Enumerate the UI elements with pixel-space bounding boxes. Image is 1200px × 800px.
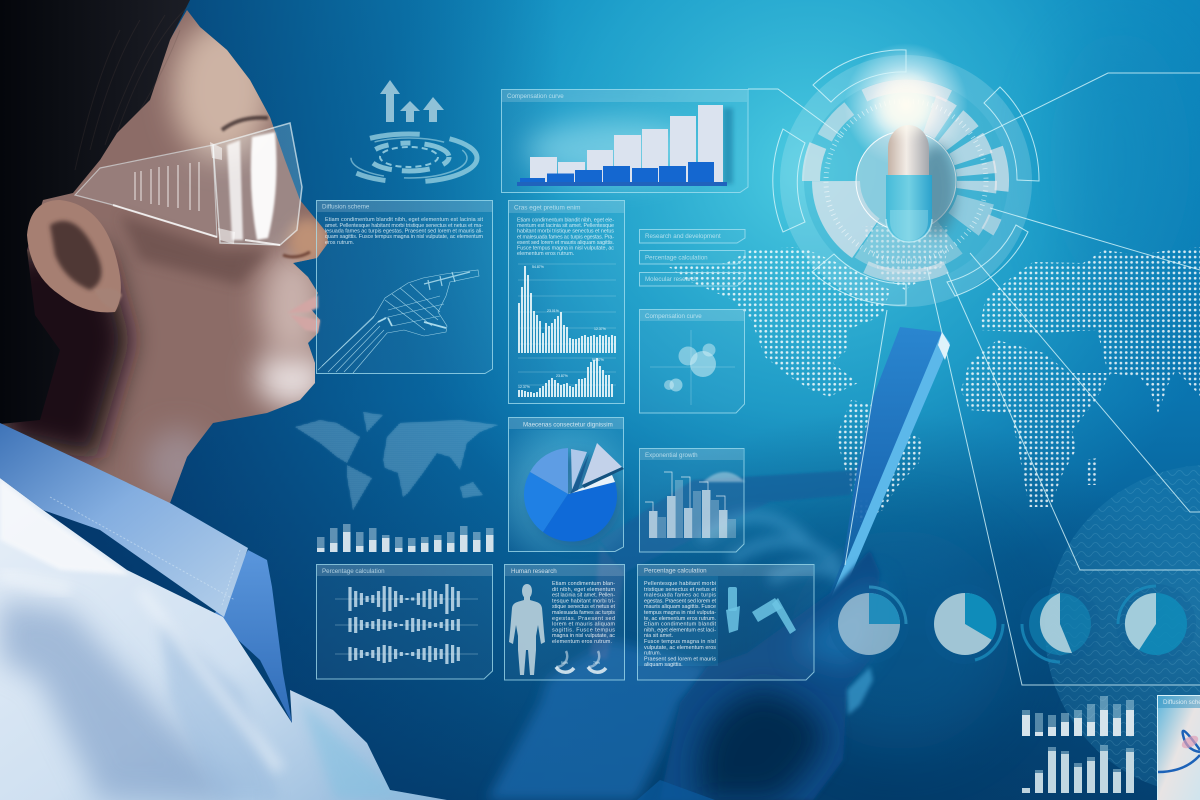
panel: cras eget pretium enim: 23.87% bbox=[556, 374, 568, 378]
panel: percentage calculation device: Praesent sed lorem et mauris bbox=[644, 656, 716, 662]
panel: human research: 75% bbox=[593, 661, 600, 665]
blue bars bbox=[520, 162, 714, 182]
panel: cras eget pretium enim: Etiam condimentum blandit nibh, eget ele- bbox=[517, 218, 614, 224]
nostril bbox=[283, 252, 310, 257]
small world map bbox=[295, 412, 498, 510]
panel: percentage calculation device: rutrum. bbox=[644, 651, 661, 657]
panel: diffusion scheme: quam sagittis. Fusce tempus magna in nisl vulputate, ac elementum bbox=[325, 234, 484, 240]
icon: upward arrows bbox=[380, 80, 444, 122]
panel: exponential growth bbox=[640, 448, 744, 552]
panel: diffusion scheme bbox=[316, 200, 492, 374]
panel: cras eget pretium enim: Fusce tempus magna in nisl vulputate, ac bbox=[517, 246, 614, 252]
panel: human research: 50% bbox=[561, 661, 568, 665]
ear bbox=[27, 200, 122, 312]
panel: human research: stique senectus et netus et bbox=[552, 604, 616, 610]
panel: percentage calculation device: Pellentesque habitant morbi bbox=[644, 581, 716, 587]
panel: percentage calculation device: Fusce tempus magna in nisl bbox=[644, 639, 716, 645]
lab coat bbox=[0, 478, 447, 800]
panel: maecenas pie chart bbox=[508, 418, 624, 552]
panel: human research: tesque habitant morbi tri- bbox=[552, 598, 615, 604]
research label tabs bbox=[640, 230, 745, 286]
segmented dial bbox=[779, 54, 1033, 308]
coat folds bbox=[0, 484, 399, 800]
panel: diffusion scheme: eros rutrum. bbox=[325, 240, 354, 246]
panel: cras eget pretium enim bbox=[508, 200, 624, 404]
panel: human research: dit nibh, eget elementum bbox=[552, 587, 616, 593]
panel: cras eget pretium enim: mentum est lacinia sit amet. Pellentesque bbox=[517, 223, 614, 229]
donut gauges bbox=[556, 651, 606, 672]
panel: percentage calculation device bbox=[638, 564, 814, 680]
panel: human research: Etiam condimentum blan- bbox=[552, 581, 615, 587]
shelf bbox=[517, 182, 727, 186]
shirt collar bbox=[0, 423, 248, 617]
icon: human silhouette bbox=[509, 584, 545, 675]
panel: exponential growth: Exponential growth bbox=[645, 452, 698, 459]
panel: compensation curve bars bbox=[502, 90, 748, 192]
bar chart under small map bbox=[317, 524, 494, 552]
panel: cras eget pretium enim: 56.87% bbox=[592, 358, 604, 362]
white bars bbox=[530, 105, 723, 182]
panel: compensation curve bars: Compensation curve bbox=[507, 93, 564, 100]
panel: percentage calculation device: egestas. Praesent sed lorem et bbox=[644, 598, 716, 604]
panel: percentage calculation device: Etiam condimentum blandit bbox=[644, 622, 716, 628]
panel: percentage calculation device: aliquam sagittis. bbox=[644, 662, 683, 668]
hair strands bbox=[75, 5, 190, 170]
hair bbox=[0, 0, 190, 424]
panel: cras eget pretium enim: esent sed lorem et mauris aliquam sagittis. bbox=[517, 240, 614, 246]
panel: human research bbox=[504, 564, 624, 680]
panel: cras eget pretium enim: Cras eget pretium enim bbox=[514, 204, 580, 212]
panel: diffusion scheme: Etiam condimentum blandit nibh, eget elementum est lacinia sit bbox=[325, 217, 484, 223]
panel: percentage calculation device: malesuada fames ac turpis bbox=[644, 593, 716, 599]
waveform rows bbox=[350, 584, 458, 664]
panel: cras eget pretium enim: elementum eros rutrum. bbox=[517, 251, 574, 257]
panel: percentage calculation waveform: Percentage calculation bbox=[322, 568, 385, 575]
panel: compensation curve bubbles: Compensation curve bbox=[645, 313, 702, 320]
blue shirt bbox=[213, 550, 292, 723]
panel: percentage calculation device: mauris aliquam sagittis. Fusce bbox=[644, 604, 716, 610]
hand holding tablet bbox=[487, 327, 950, 800]
panel: percentage calculation device: nibh, eget elementum est laci- bbox=[644, 627, 716, 633]
upper bar chart bbox=[519, 266, 615, 353]
panel: cras eget pretium enim: et malesuada fames ac turpis egestas. Pra- bbox=[517, 234, 614, 240]
panel: maecenas pie chart: Maecenas consectetur dignissim bbox=[523, 422, 613, 428]
icon: capsule bbox=[878, 77, 956, 242]
inner circle bbox=[856, 131, 956, 231]
target rings around capsule bbox=[748, 43, 1200, 685]
panel: human research: egestas. Praesent sed bbox=[552, 616, 615, 622]
research label tabs: Research and development bbox=[645, 233, 721, 240]
panel: percentage calculation device: tempus magna in nisl vulputa- bbox=[644, 610, 716, 616]
panel: human research: lorem et mauris aliquam bbox=[552, 622, 616, 628]
pie slices bbox=[524, 443, 624, 542]
dotted world map, large bbox=[669, 226, 1200, 523]
panel: percentage calculation waveform bbox=[316, 564, 492, 679]
face and neck bbox=[0, 10, 328, 503]
bar charts bottom right bbox=[1022, 696, 1134, 793]
panel: diffusion scheme: Diffusion scheme bbox=[322, 204, 370, 210]
research label tabs: Percentage calculation bbox=[645, 254, 708, 262]
research label tabs: Molecular research bbox=[645, 276, 698, 283]
panel: percentage calculation device: vulputate, ac elementum eros bbox=[644, 645, 716, 651]
panel: diffusion scheme thumbnail bbox=[1158, 696, 1200, 800]
human figure: woman scientist bbox=[0, 0, 447, 800]
panel: human research: sagittis. Fusce tempus bbox=[552, 627, 615, 633]
panel: human research: elementum eros rutrum. bbox=[552, 639, 612, 645]
panel: human research: est lacinia sit amet. Pellen- bbox=[552, 593, 615, 599]
panel: percentage calculation device: tristique senectus et netus et bbox=[644, 587, 716, 593]
panel: percentage calculation device: Percentage calculation bbox=[644, 568, 707, 574]
panel: percentage calculation device: te, ac elementum eros rutrum. bbox=[644, 616, 716, 622]
panel: human research: malesuada fames ac turpis bbox=[552, 610, 615, 616]
panel: human research: magna in nisl vulputate, ac bbox=[552, 633, 615, 639]
icon: radar rings bbox=[341, 134, 477, 182]
safety glasses bbox=[75, 123, 302, 245]
panel: percentage calculation device: nia sit amet. bbox=[644, 633, 673, 639]
icon: medical device bbox=[726, 587, 796, 634]
panel: cras eget pretium enim: 54.87% bbox=[532, 265, 544, 269]
bar shadow bbox=[723, 108, 733, 184]
panel: human research: Human research bbox=[511, 568, 557, 575]
chart grid bbox=[518, 264, 616, 385]
eyebrow bbox=[222, 118, 268, 130]
lower bar chart bbox=[519, 358, 612, 397]
panel: cras eget pretium enim: habitant morbi tristique senectus et netus bbox=[517, 229, 614, 235]
bracket and connector lines bbox=[748, 50, 1200, 685]
panel: cras eget pretium enim: 23.01% bbox=[547, 309, 559, 313]
panel: diffusion scheme: lesuada fames ac turpis egestas. Praesent sed lorem et mauris ali- bbox=[325, 228, 483, 234]
lips bbox=[287, 295, 320, 332]
background sphere bbox=[1045, 465, 1200, 795]
icon: robot hand wireframe bbox=[318, 270, 479, 373]
pie gauges row bbox=[829, 584, 1196, 664]
panel: diffusion scheme: amet. Pellentesque habitant morbi tristique senectus et netus et ma- bbox=[325, 223, 483, 229]
panel: cras eget pretium enim: 12.37% bbox=[518, 385, 530, 389]
panel: cras eget pretium enim: 12.37% bbox=[594, 327, 606, 331]
panel: compensation curve bubbles bbox=[640, 310, 744, 413]
